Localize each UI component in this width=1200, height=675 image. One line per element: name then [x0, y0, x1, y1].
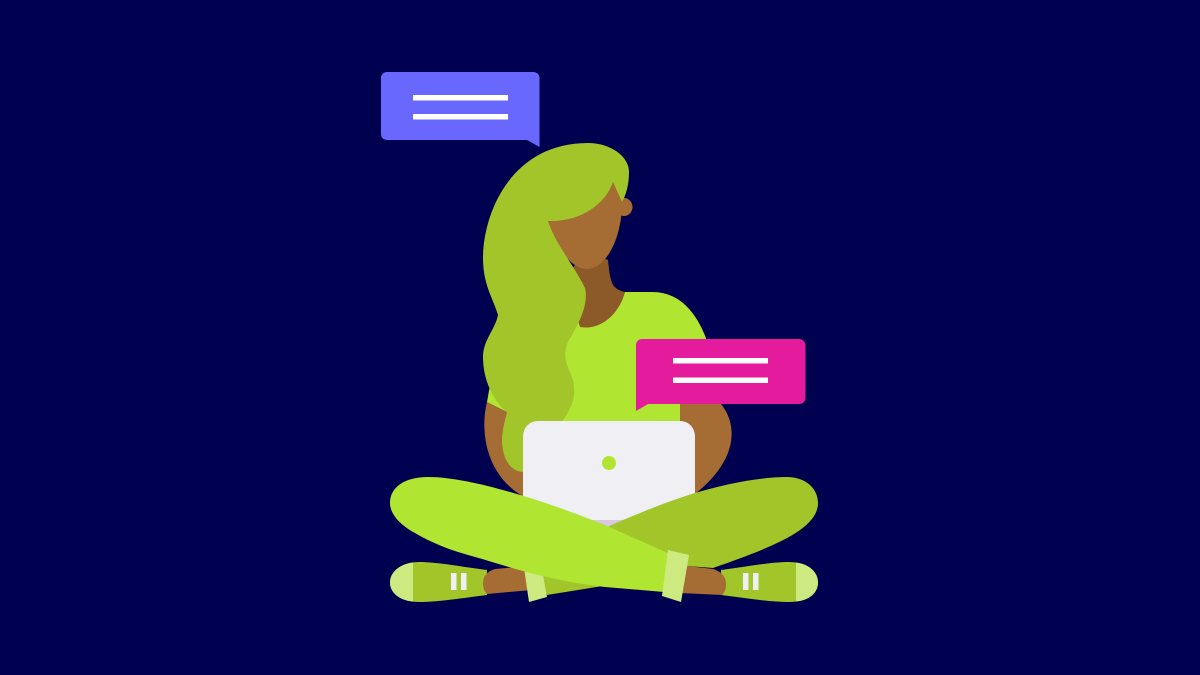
right ankle [680, 565, 726, 595]
left toe cap [390, 562, 413, 602]
hair [483, 143, 629, 480]
right shoe laces [743, 573, 758, 590]
shirt [487, 292, 706, 425]
front leg [390, 477, 670, 592]
blue bubble text lines [413, 95, 508, 120]
left sock band [524, 568, 547, 602]
pink bubble text lines [673, 358, 768, 383]
right arm [680, 404, 732, 494]
left shoe [390, 562, 487, 602]
speech bubble: blue [381, 72, 540, 147]
figure [390, 143, 818, 602]
right shoe [721, 562, 818, 602]
face [548, 180, 622, 269]
right toe cap [796, 562, 818, 602]
laptop base edge [540, 519, 650, 531]
laptop logo dot [602, 456, 616, 470]
laptop [523, 421, 695, 531]
laptop lid [523, 421, 695, 520]
speech bubble: pink [636, 339, 806, 411]
neck [565, 250, 625, 328]
left arm [484, 402, 535, 497]
right sock band [662, 550, 689, 602]
ear [616, 198, 632, 216]
left ankle [483, 566, 532, 594]
left shoe laces [451, 573, 466, 590]
back leg [535, 477, 818, 595]
